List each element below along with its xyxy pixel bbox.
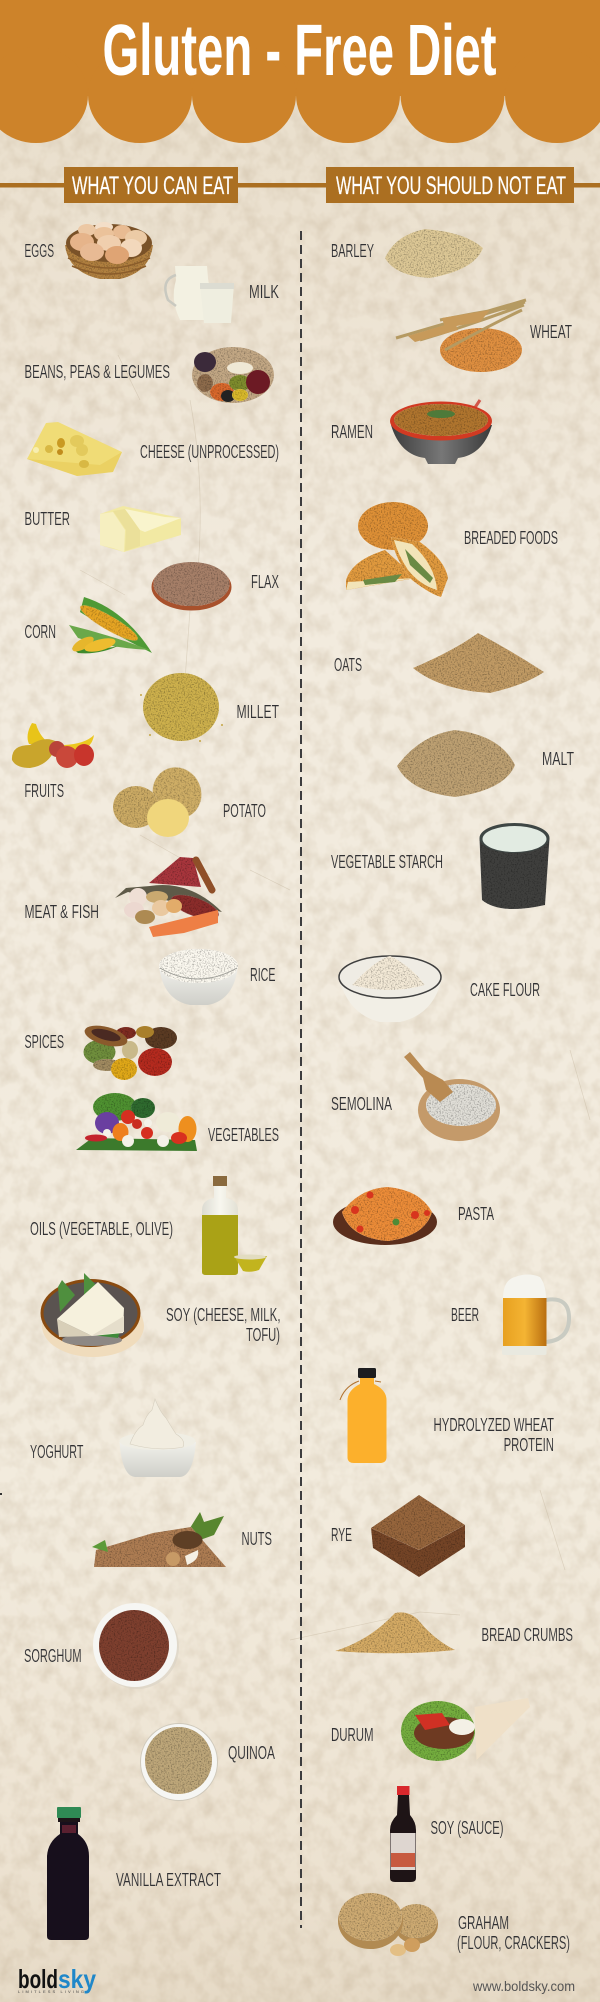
icon: juice bottle xyxy=(340,1368,386,1463)
icon: oil bottle and dish xyxy=(202,1176,267,1275)
label: vanilla extract: VANILLA EXTRACT xyxy=(116,1870,221,1890)
icon: spices xyxy=(82,1022,177,1080)
icon: flax bowl xyxy=(152,562,232,610)
label: graham xyxy=(457,1913,570,1953)
logo: boldsky: LIMITLESS LIVING xyxy=(18,1989,84,1994)
icon: millet xyxy=(140,673,223,742)
icon: milk jug and glass xyxy=(165,266,234,323)
website url: www.boldsky.com xyxy=(472,1978,575,1994)
label: butter: BUTTER xyxy=(24,509,70,529)
icon: rice bowl xyxy=(159,949,238,1005)
icon: pasta plate xyxy=(333,1187,437,1245)
label: meat and fish: MEAT & FISH xyxy=(24,902,99,922)
column divider xyxy=(300,231,302,1928)
icon: butter xyxy=(100,506,181,552)
icon: rye bread xyxy=(371,1495,465,1577)
section rule xyxy=(0,183,600,188)
icon: starch cup xyxy=(480,823,550,909)
icon: nuts xyxy=(92,1512,226,1567)
icon: oats pile xyxy=(413,633,544,693)
label: vegetable starch: VEGETABLE STARCH xyxy=(331,852,443,872)
icon: meat and fish xyxy=(115,857,222,937)
logo: boldsky xyxy=(18,1964,96,1994)
label: beans, peas and legumes: BEANS, PEAS & LEGUMES xyxy=(24,362,170,382)
icon: ramen bowl xyxy=(390,400,492,464)
icon: eggs in basket xyxy=(65,222,153,279)
label: oils: OILS (VEGETABLE, OLIVE) xyxy=(30,1219,173,1239)
icon: fruits xyxy=(12,723,94,768)
label: semolina: SEMOLINA xyxy=(331,1094,392,1114)
icon: cake flour bowl xyxy=(339,956,441,1022)
icon: corn xyxy=(69,597,152,654)
label: soy: TOFU) xyxy=(246,1325,280,1345)
label: millet: MILLET xyxy=(236,702,279,722)
icon: bread crumbs pile xyxy=(335,1612,455,1653)
label: potato: POTATO xyxy=(223,801,266,821)
icon: malt pile xyxy=(397,730,515,797)
panel: what you can eat xyxy=(12,222,280,1940)
label: hydrolyzed wheat protein xyxy=(434,1415,554,1455)
panel: what you should not eat xyxy=(331,229,574,1956)
label: hydrolyzed wheat protein: PROTEIN xyxy=(504,1435,554,1455)
icon: durum wrap xyxy=(401,1698,530,1761)
header banner xyxy=(0,0,600,143)
label: barley: BARLEY xyxy=(331,241,374,261)
label: durum: DURUM xyxy=(331,1725,374,1745)
label: spices: SPICES xyxy=(24,1032,64,1052)
label: eggs: EGGS xyxy=(24,241,54,261)
label: rice: RICE xyxy=(250,965,276,985)
label: wheat: WHEAT xyxy=(530,322,572,342)
logo: boldsky: bold xyxy=(18,1964,58,1994)
label: cake flour: CAKE FLOUR xyxy=(470,980,540,1000)
heading: what you can eat xyxy=(64,167,238,203)
icon: breaded foods xyxy=(346,502,448,597)
icon: semolina bowl and scoop xyxy=(404,1052,500,1141)
label: pasta: PASTA xyxy=(458,1204,494,1224)
icon: soy sauce bottle xyxy=(390,1786,416,1882)
label: sorghum: SORGHUM xyxy=(24,1646,82,1666)
icon: beer mug xyxy=(502,1274,569,1355)
icon: potatoes xyxy=(113,759,210,837)
icon: quinoa bowl xyxy=(140,1724,218,1800)
label: soy sauce: SOY (SAUCE) xyxy=(430,1818,504,1838)
icon: yoghurt xyxy=(120,1399,196,1477)
label: nuts: NUTS xyxy=(242,1529,272,1549)
icon: barley pile xyxy=(385,229,483,278)
icon: sorghum bowl xyxy=(93,1603,179,1689)
label: rye: RYE xyxy=(331,1525,352,1545)
label: vegetables: VEGETABLES xyxy=(208,1125,279,1145)
icon: vegetables xyxy=(76,1093,197,1151)
icon: tofu on plate xyxy=(40,1273,144,1357)
label: beer: BEER xyxy=(451,1305,479,1325)
label: soy: SOY (CHEESE, MILK, xyxy=(166,1305,280,1325)
label: soy xyxy=(166,1305,280,1345)
label: oats: OATS xyxy=(334,655,362,675)
icon: beans xyxy=(192,347,274,403)
label: graham: GRAHAM xyxy=(458,1913,509,1933)
label: fruits: FRUITS xyxy=(24,781,64,801)
heading: what you can eat: WHAT YOU CAN EAT xyxy=(72,172,233,200)
icon: cheese wedge xyxy=(27,422,122,476)
label: malt: MALT xyxy=(542,749,574,769)
label: cheese: CHEESE (UNPROCESSED) xyxy=(140,442,279,462)
label: quinoa: QUINOA xyxy=(228,1743,275,1763)
icon: vanilla bottle xyxy=(47,1807,89,1940)
icon: graham crackers xyxy=(338,1893,438,1956)
label: corn: CORN xyxy=(24,622,56,642)
label: ramen: RAMEN xyxy=(331,422,373,442)
heading: what you should not eat xyxy=(326,167,574,203)
label: flax: FLAX xyxy=(251,572,279,592)
logo: boldsky: sky xyxy=(58,1964,96,1994)
icon: wheat xyxy=(396,300,526,372)
label: milk: MILK xyxy=(249,282,279,302)
label: yoghurt: YOGHURT xyxy=(30,1442,83,1462)
